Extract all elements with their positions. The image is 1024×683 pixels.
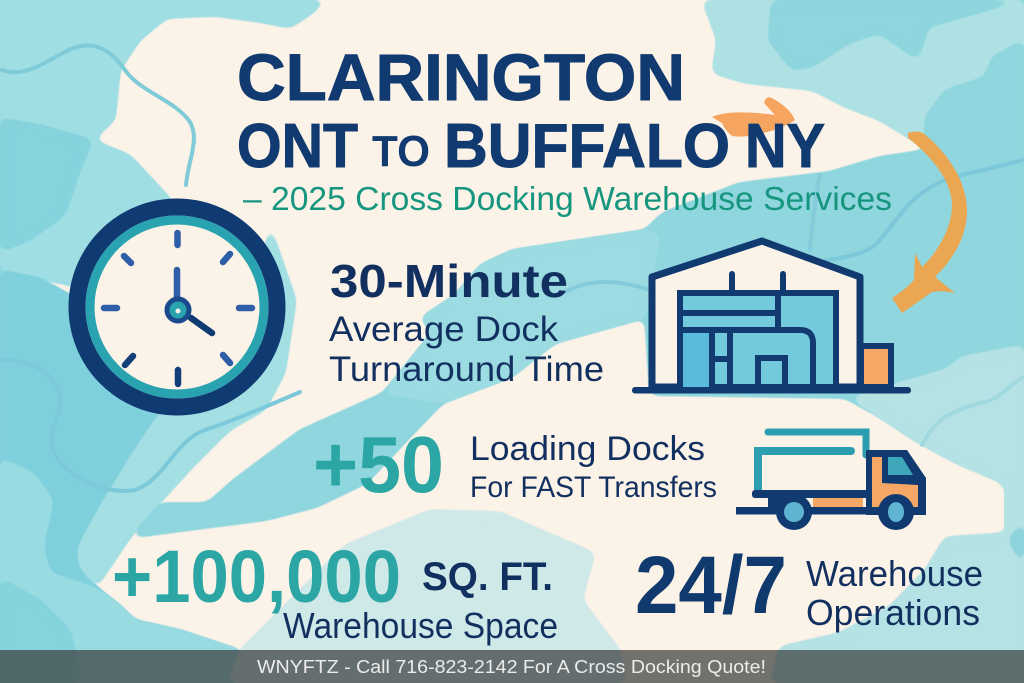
background: river lines	[2, 46, 1022, 491]
stat: 24/7 operations: 24/7	[635, 540, 787, 631]
stat: 24/7 operations	[635, 540, 983, 633]
icon: clock	[77, 207, 277, 407]
stat: +100,000 sq ft: +100,000	[112, 535, 401, 618]
stat: 30-minute turnaround: 30-Minute	[330, 255, 568, 307]
stat: 30-minute turnaround: Turnaround Time	[329, 350, 604, 389]
title: NY	[745, 112, 825, 181]
icon: truck	[736, 432, 926, 530]
title: ONT	[237, 112, 358, 181]
title: TO	[372, 127, 430, 176]
title	[237, 40, 825, 181]
stat: +100,000 sq ft	[112, 535, 558, 646]
stat: 24/7 operations: Warehouse	[806, 553, 983, 594]
icon: warehouse	[632, 241, 911, 394]
stat: 30-minute turnaround: Average Dock	[329, 310, 559, 349]
subtitle: – 2025 Cross Docking Warehouse Services	[243, 180, 892, 217]
stat: +50 loading docks	[313, 420, 717, 509]
stat: +50 loading docks: +50	[313, 420, 444, 509]
stat: 24/7 operations: Operations	[806, 592, 980, 633]
arrow: small orange arrow behind title	[712, 97, 795, 137]
stat: 30-minute turnaround	[329, 255, 604, 389]
title: BUFFALO	[444, 112, 730, 181]
stat: +100,000 sq ft: Warehouse Space	[283, 605, 558, 646]
footer bar	[0, 650, 1024, 683]
stat: +50 loading docks: Loading Docks	[470, 430, 705, 468]
footer bar: WNYFTZ - Call 716-823-2142 For A Cross Docking Quote!	[257, 657, 766, 677]
arrow: large orange curved arrow	[892, 132, 967, 313]
stat: +50 loading docks: For FAST Transfers	[470, 471, 717, 504]
stat: +100,000 sq ft: SQ. FT.	[422, 555, 553, 599]
title: CLARINGTON	[237, 40, 685, 114]
